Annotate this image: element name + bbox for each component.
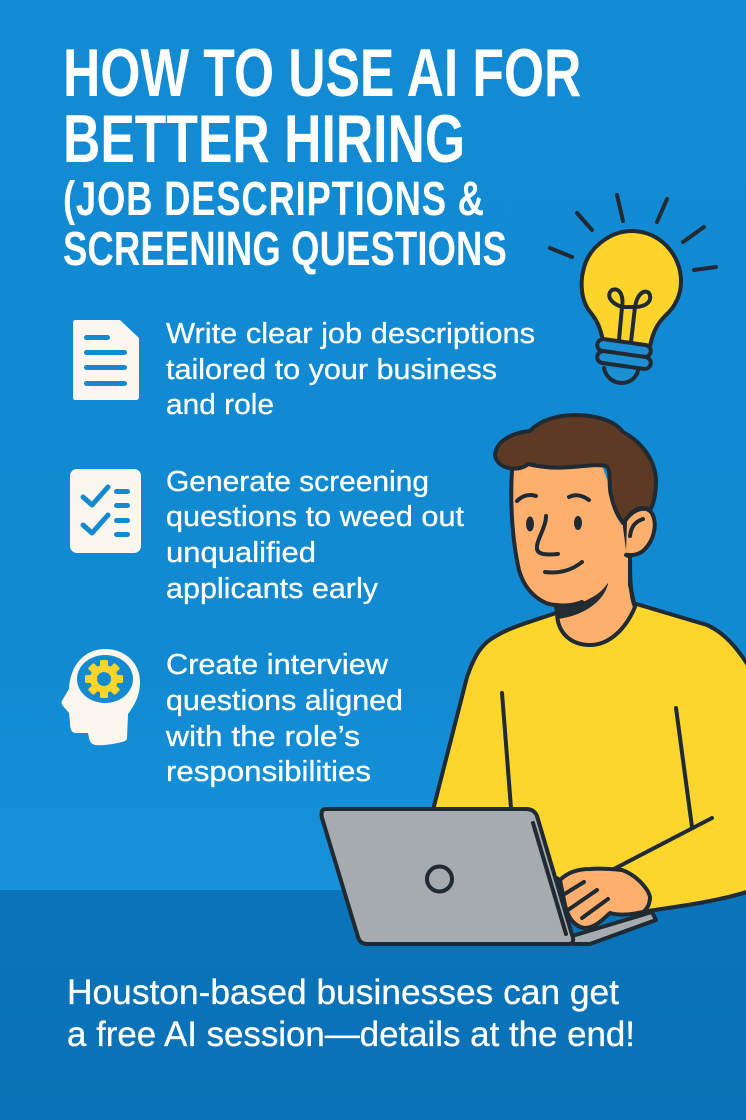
title	[63, 34, 581, 276]
title: (JOB DESCRIPTIONS &	[63, 172, 484, 226]
text: item 1: tailored to your business	[166, 354, 497, 386]
nose and mouth	[537, 516, 582, 573]
item 1: job descriptions	[73, 318, 535, 421]
hair	[495, 415, 656, 523]
footer band	[0, 890, 746, 1120]
text: item 1: Write clear job descriptions	[166, 318, 535, 350]
item 2: screening questions	[70, 466, 464, 605]
text: item 1: and role	[166, 389, 274, 421]
text: item 2: Generate screening	[166, 466, 429, 498]
text: item 3: responsibilities	[166, 756, 371, 788]
text: item 2: applicants early	[166, 573, 379, 605]
background	[0, 0, 746, 890]
neck shadow	[555, 584, 607, 618]
item 3: interview questions	[62, 649, 403, 788]
icon: head with gear	[62, 649, 140, 745]
footer text: Houston-based businesses can get	[67, 973, 619, 1012]
text: item 3: questions aligned	[166, 685, 403, 717]
text: item 2: unqualified	[166, 537, 316, 569]
laptop base	[572, 912, 656, 944]
text: item 1	[166, 318, 535, 421]
face	[511, 460, 626, 605]
title: HOW TO USE AI FOR	[63, 34, 581, 111]
title: BETTER HIRING	[63, 100, 465, 177]
neck	[557, 550, 635, 645]
text: item 3	[165, 649, 403, 788]
text: item 2	[166, 466, 464, 605]
ear	[624, 509, 655, 555]
text: item 2: questions to weed out	[166, 501, 464, 533]
eyes and brows	[517, 495, 589, 532]
hand	[560, 869, 650, 928]
title: SCREENING QUESTIONS	[63, 222, 507, 276]
sweater	[433, 603, 746, 911]
text: item 3: Create interview	[166, 649, 389, 681]
ear inner	[630, 519, 643, 536]
footer text: a free AI session—details at the end!	[67, 1015, 635, 1054]
footer text	[67, 973, 635, 1054]
illustration: person with laptop	[322, 415, 746, 944]
icon: light bulb	[550, 195, 716, 383]
laptop lid	[322, 809, 573, 944]
text: item 3: with the role’s	[165, 721, 360, 753]
icon: document	[73, 320, 139, 400]
icon: checklist	[70, 469, 141, 553]
